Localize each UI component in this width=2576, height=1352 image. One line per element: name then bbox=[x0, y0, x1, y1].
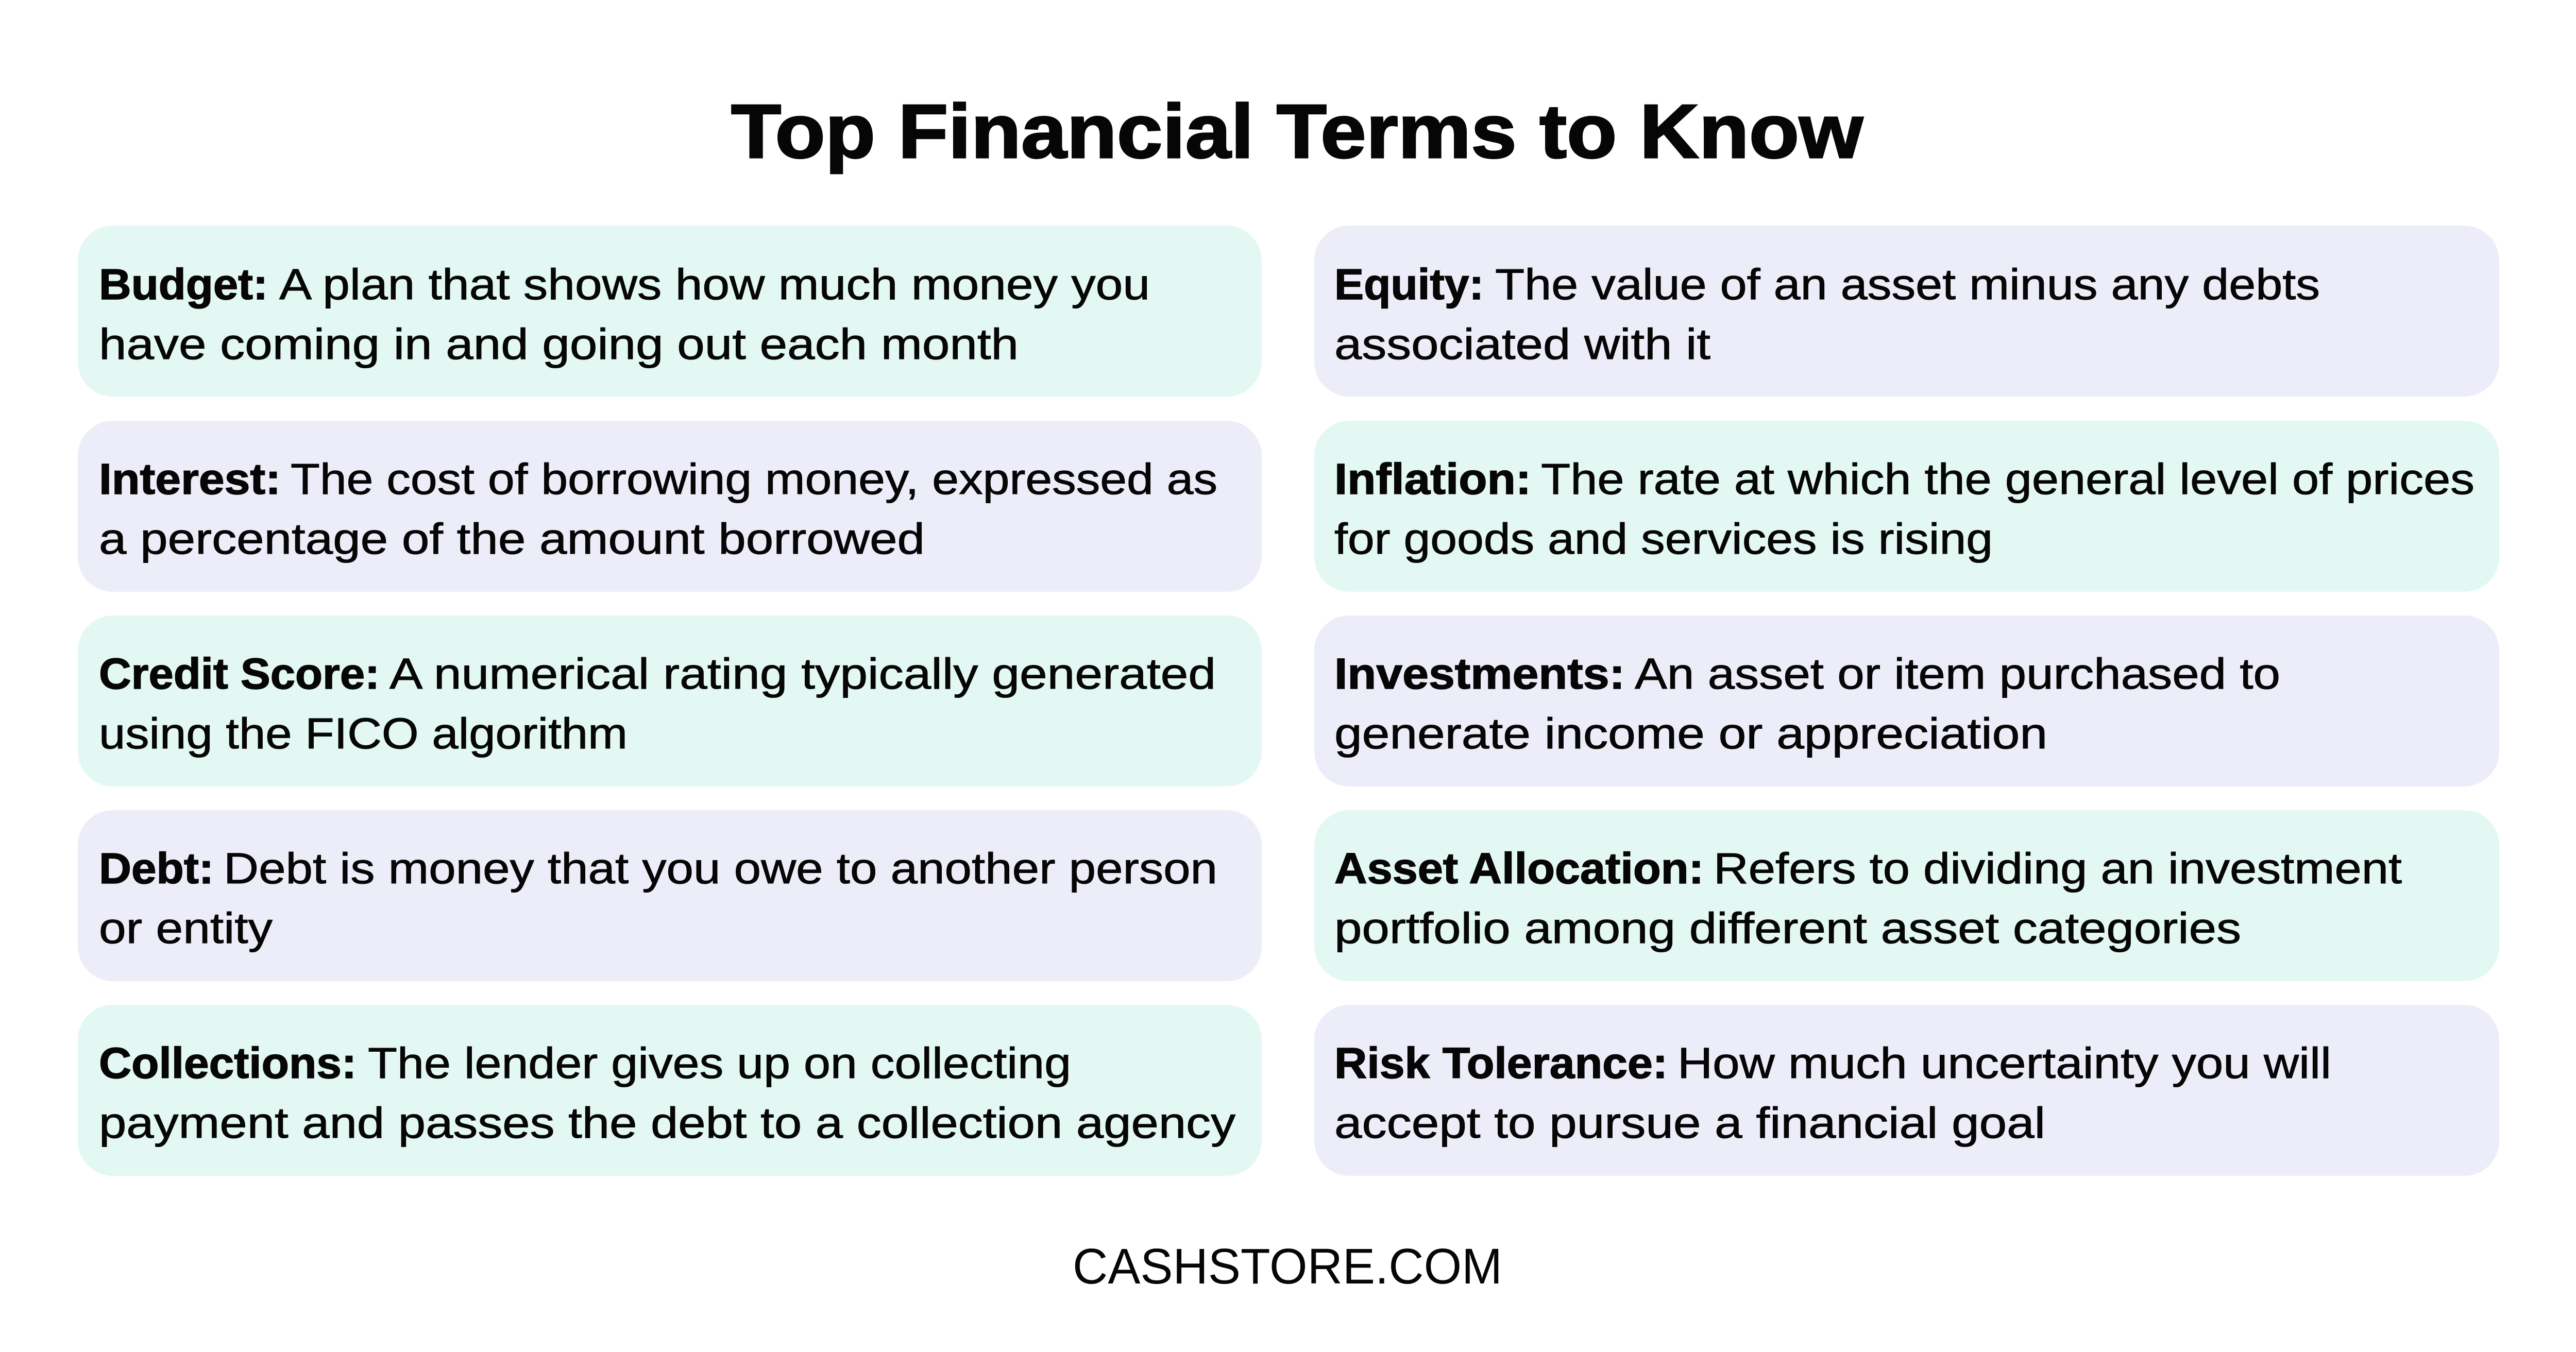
text: debt definition: Debt is money that you owe to another person bbox=[224, 844, 1217, 893]
text: collections definition: The lender gives up on collecting bbox=[368, 1039, 1071, 1087]
text: asset allocation definition: portfolio among different asset categories bbox=[1334, 904, 2241, 952]
text: investments definition: An asset or item purchased to bbox=[1635, 649, 2280, 698]
text: debt definition: or entity bbox=[99, 904, 273, 952]
text: credit score definition bbox=[99, 649, 1216, 758]
panel: asset allocation bbox=[1314, 810, 2499, 981]
title: Top Financial Terms to Know bbox=[731, 89, 1863, 174]
text: collections definition: Collections: bbox=[99, 1039, 357, 1087]
text: interest definition bbox=[99, 455, 1217, 563]
text: investments definition: generate income or appreciation bbox=[1334, 709, 2047, 758]
text: credit score definition: A numerical rating typically generated bbox=[389, 649, 1216, 698]
text: equity definition: Equity: bbox=[1334, 260, 1484, 309]
text: interest definition: The cost of borrowing money, expressed as bbox=[291, 455, 1217, 503]
text: equity definition: associated with it bbox=[1334, 320, 1710, 368]
panel: collections bbox=[78, 1005, 1262, 1176]
panel: equity bbox=[1314, 226, 2499, 397]
footer: source: CASHSTORE.COM bbox=[1073, 1238, 1502, 1294]
text: asset allocation definition: Refers to dividing an investment bbox=[1714, 844, 2402, 893]
text: interest definition: Interest: bbox=[99, 455, 281, 503]
text: equity definition: The value of an asset minus any debts bbox=[1495, 260, 2320, 309]
text: inflation definition: The rate at which the general level of prices bbox=[1541, 455, 2475, 503]
text: collections definition: payment and passes the debt to a collection agency bbox=[99, 1099, 1235, 1147]
text: debt definition: Debt: bbox=[99, 844, 214, 893]
text: inflation definition bbox=[1334, 455, 2475, 563]
text: credit score definition: using the FICO algorithm bbox=[99, 709, 628, 758]
text: budget definition: A plan that shows how much money you bbox=[279, 260, 1150, 309]
text: risk tolerance definition: How much uncertainty you will bbox=[1677, 1039, 2331, 1087]
text: investments definition: Investments: bbox=[1334, 649, 1625, 698]
text: investments definition bbox=[1334, 649, 2280, 758]
text: collections definition bbox=[99, 1039, 1235, 1147]
text: asset allocation definition: Asset Allocation: bbox=[1334, 844, 1704, 893]
panel: debt bbox=[78, 810, 1262, 981]
panel: credit score bbox=[78, 615, 1262, 786]
panel: interest bbox=[78, 421, 1262, 592]
text: interest definition: a percentage of the amount borrowed bbox=[99, 515, 925, 563]
text: budget definition: have coming in and going out each month bbox=[99, 320, 1019, 368]
text: equity definition bbox=[1334, 260, 2320, 368]
panel: investments bbox=[1314, 615, 2499, 786]
text: risk tolerance definition bbox=[1334, 1039, 2331, 1147]
text: risk tolerance definition: accept to pursue a financial goal bbox=[1334, 1099, 2045, 1147]
panel: budget bbox=[78, 226, 1262, 397]
text: debt definition bbox=[99, 844, 1217, 952]
text: inflation definition: Inflation: bbox=[1334, 455, 1531, 503]
panel: risk tolerance bbox=[1314, 1005, 2499, 1176]
text: risk tolerance definition: Risk Tolerance: bbox=[1334, 1039, 1668, 1087]
text: inflation definition: for goods and services is rising bbox=[1334, 515, 1993, 563]
text: budget definition bbox=[99, 260, 1150, 368]
text: credit score definition: Credit Score: bbox=[99, 649, 380, 698]
text: budget definition: Budget: bbox=[99, 260, 268, 309]
panel: inflation bbox=[1314, 421, 2499, 592]
text: asset allocation definition bbox=[1334, 844, 2402, 952]
